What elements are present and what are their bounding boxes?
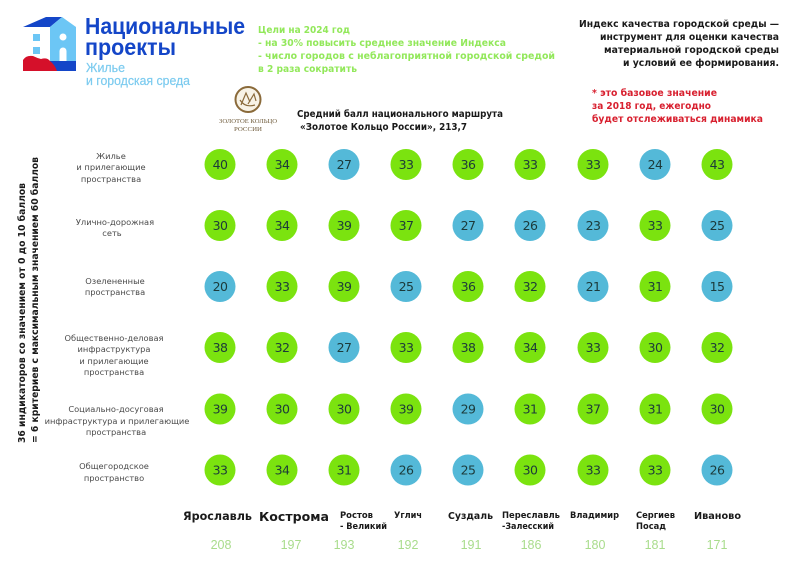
label: social infrastructure: пространства	[86, 427, 146, 437]
row 5 scores: 29	[461, 402, 476, 416]
city names: -Залесский	[502, 522, 554, 532]
base value note	[592, 88, 763, 125]
city names: Ростов	[340, 511, 373, 521]
goals text: - на 30% повысить среднее значение Индекса	[258, 38, 506, 49]
row 6 scores: 33	[213, 462, 227, 478]
city totals: 191	[461, 538, 481, 552]
route average score: «Золотое Кольцо России», 213,7	[300, 122, 467, 133]
row 5 scores	[204, 394, 732, 424]
city names: Сергиев	[636, 511, 675, 521]
row 4 scores: 33	[586, 340, 600, 355]
row 6 scores	[204, 454, 732, 486]
base value note: будет отслеживаться динамика	[592, 114, 763, 125]
goals text: - число городов с неблагоприятной городской средой	[258, 51, 555, 62]
row 5 scores: 31	[648, 402, 662, 416]
label: citywide	[79, 461, 149, 483]
label: citywide: пространство	[84, 473, 144, 483]
label: social infrastructure	[45, 404, 189, 437]
row 6 scores: 34	[275, 462, 290, 478]
base value note: за 2018 год, ежегодно	[592, 101, 711, 112]
label: streets: сеть	[102, 228, 122, 238]
row 2 scores: 27	[461, 218, 475, 233]
row 4 scores: 34	[523, 340, 538, 355]
goals text: в 2 раза сократить	[258, 64, 357, 75]
row 6 scores: 33	[586, 462, 600, 478]
city totals	[211, 538, 727, 552]
city names: Ярославль	[183, 509, 252, 523]
label: social infrastructure: инфраструктура и прилегающие	[45, 416, 189, 426]
row 6 scores: 25	[461, 462, 475, 478]
label: streets	[76, 217, 154, 238]
row labels	[45, 151, 189, 483]
row 1 scores: 40	[213, 157, 228, 172]
city names: Суздаль	[448, 511, 493, 522]
row 1 scores: 33	[586, 157, 600, 172]
row 6 scores: 30	[523, 462, 538, 478]
row 2 scores: 39	[337, 218, 352, 233]
city totals: 180	[585, 538, 605, 552]
label: housing: Жилье	[96, 151, 126, 161]
vertical axis caption: 36 индикаторов со значением от 0 до 10 баллов	[16, 183, 28, 443]
vertical axis caption: = 6 критериев с максимальным значением 60 баллов	[29, 157, 41, 443]
city totals: 192	[398, 538, 418, 552]
row 4 scores: 38	[213, 340, 228, 355]
label: business infrastructure	[64, 333, 164, 377]
row 2 scores	[204, 210, 732, 241]
label: business infrastructure: инфраструктура	[78, 344, 150, 354]
route average score	[297, 109, 503, 133]
row 3 scores: 33	[275, 279, 289, 294]
city names: Владимир	[570, 511, 619, 521]
label: business infrastructure: Общественно-деловая	[64, 333, 164, 343]
golden ring logo: ЗОЛОТОЕ КОЛЬЦО	[219, 118, 278, 125]
city totals: 197	[281, 538, 301, 552]
row 5 scores: 31	[523, 402, 537, 416]
city totals: 181	[645, 538, 665, 552]
city names	[183, 509, 741, 532]
logo title	[85, 13, 245, 88]
goals text	[258, 25, 555, 75]
row 6 scores: 26	[710, 462, 725, 478]
row 6 scores: 33	[648, 462, 662, 478]
index description: Индекс качества городской среды —	[579, 19, 779, 30]
row 4 scores: 32	[275, 340, 289, 355]
row 4 scores: 27	[337, 340, 351, 355]
row 3 scores: 20	[213, 279, 228, 294]
city totals: 171	[707, 538, 727, 552]
row 1 scores: 24	[648, 157, 663, 172]
row 3 scores	[204, 271, 732, 302]
route average score: Средний балл национального маршрута	[297, 109, 503, 120]
index description	[579, 19, 779, 69]
logo title: проекты	[85, 34, 176, 60]
row 5 scores: 30	[337, 402, 352, 416]
row 5 scores: 39	[213, 402, 228, 416]
logo: national projects house	[23, 17, 76, 71]
golden ring logo: РОССИИ	[234, 126, 263, 133]
row 5 scores: 39	[399, 402, 414, 416]
row 3 scores: 21	[586, 279, 600, 294]
row 2 scores: 25	[710, 218, 724, 233]
golden ring logo	[219, 87, 278, 133]
label: business infrastructure: пространства	[84, 367, 144, 377]
label: social infrastructure: Социально-досуговая	[68, 404, 164, 414]
label: green spaces: пространства	[85, 287, 145, 297]
city names: Иваново	[694, 511, 741, 522]
row 5 scores: 30	[710, 402, 725, 416]
city totals: 186	[521, 538, 541, 552]
row 3 scores: 32	[523, 279, 537, 294]
logo title: и городская среда	[86, 74, 190, 88]
city names: Кострома	[259, 509, 329, 524]
logo title: Национальные	[85, 13, 245, 39]
row 2 scores: 37	[399, 218, 413, 233]
index description: материальной городской среды	[604, 45, 779, 56]
row 4 scores: 38	[461, 340, 476, 355]
label: housing: и прилегающие	[76, 162, 146, 172]
row 2 scores: 34	[275, 218, 290, 233]
label: housing	[76, 151, 146, 184]
city names: Посад	[636, 522, 666, 532]
base value note: * это базовое значение	[592, 88, 717, 99]
row 3 scores: 15	[710, 279, 724, 294]
row 1 scores: 33	[523, 157, 537, 172]
label: green spaces	[85, 276, 145, 297]
row 3 scores: 39	[337, 279, 352, 294]
row 3 scores: 31	[648, 279, 662, 294]
index description: и условий ее формирования.	[623, 58, 779, 69]
row 2 scores: 30	[213, 218, 228, 233]
row 1 scores	[204, 149, 732, 180]
label: business infrastructure: и прилегающие	[79, 356, 149, 366]
city names: Углич	[394, 511, 422, 521]
row 1 scores: 34	[275, 157, 290, 172]
row 4 scores	[204, 332, 732, 363]
row 3 scores: 25	[399, 279, 413, 294]
city totals: 193	[334, 538, 354, 552]
label: citywide: Общегородское	[79, 461, 149, 471]
label: housing: пространства	[81, 174, 141, 184]
row 6 scores: 26	[399, 462, 414, 478]
score grid	[204, 149, 732, 486]
row 1 scores: 36	[461, 157, 476, 172]
city totals: 208	[211, 538, 231, 552]
row 2 scores: 26	[523, 218, 538, 233]
logo title: Жилье	[86, 61, 125, 75]
row 2 scores: 33	[648, 218, 662, 233]
row 6 scores: 31	[337, 462, 351, 478]
index description: инструмент для оценки качества	[600, 32, 779, 43]
goals text: Цели на 2024 год	[258, 25, 350, 36]
label: streets: Улично-дорожная	[76, 217, 154, 227]
row 2 scores: 23	[586, 218, 600, 233]
label: green spaces: Озелененные	[85, 276, 145, 286]
row 5 scores: 37	[586, 402, 600, 416]
vertical axis caption	[16, 157, 41, 443]
row 1 scores: 33	[399, 157, 413, 172]
city names: Переславль	[502, 511, 560, 521]
row 4 scores: 30	[648, 340, 663, 355]
city names: - Великий	[340, 522, 387, 532]
row 1 scores: 27	[337, 157, 351, 172]
row 4 scores: 32	[710, 340, 724, 355]
row 3 scores: 36	[461, 279, 476, 294]
row 5 scores: 30	[275, 402, 290, 416]
row 1 scores: 43	[710, 157, 724, 172]
row 4 scores: 33	[399, 340, 413, 355]
